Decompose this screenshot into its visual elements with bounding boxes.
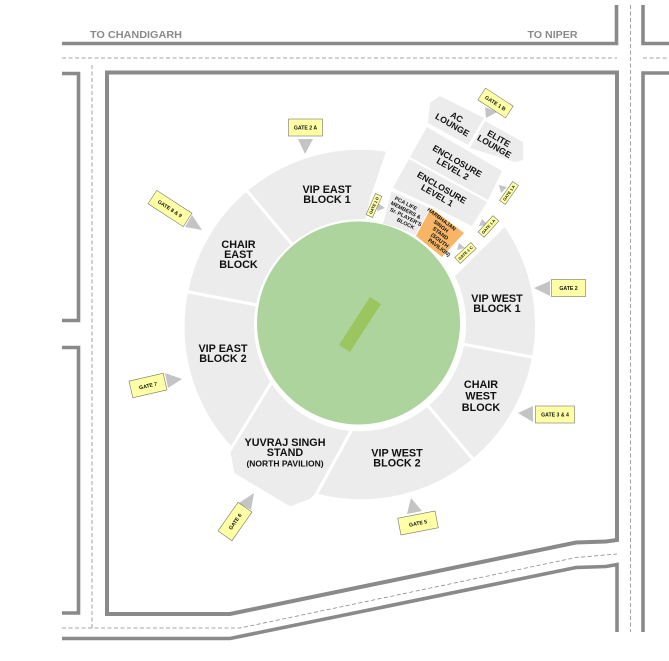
stand: PCA Life Members and Sr. Players Block: PCA LIFE bbox=[393, 196, 418, 213]
gate 3 and 4 bbox=[518, 406, 574, 423]
stand: Enclosure Level 1: LEVEL 1 bbox=[419, 182, 455, 209]
gate 5: GATE 5 bbox=[409, 519, 428, 529]
gate 1 C: GATE 1 C bbox=[457, 245, 474, 261]
stand: VIP East Block 2: BLOCK 2 bbox=[199, 353, 247, 365]
gate 1 D bbox=[366, 194, 385, 217]
stand: VIP West Block 1 bbox=[453, 225, 536, 357]
stand: VIP West Block 2: VIP WEST bbox=[371, 448, 423, 460]
gate 2 bbox=[534, 280, 586, 296]
gate 3 and 4: GATE 3 & 4 bbox=[541, 412, 569, 418]
gate 1 A upper bbox=[499, 182, 518, 204]
gate 1 A lower: GATE 1 A bbox=[481, 218, 496, 235]
stand: PCA Life Members and Sr. Players Block: MEMBERS & bbox=[389, 201, 422, 221]
stand: Harbhajan Singh Stand (South Pavilion): (SOUTH bbox=[429, 232, 449, 250]
gate 2: GATE 2 bbox=[559, 286, 578, 292]
stand: Yuvraj Singh Stand: STAND bbox=[267, 447, 303, 459]
stand: AC Lounge bbox=[428, 96, 484, 145]
gate 2 A bbox=[288, 119, 322, 154]
gate 7: GATE 7 bbox=[139, 381, 158, 391]
stand: AC Lounge: AC bbox=[449, 110, 465, 125]
gate 8 and 9 bbox=[148, 190, 202, 230]
stand: VIP West Block 1: BLOCK 1 bbox=[473, 303, 521, 315]
gate 1 C bbox=[455, 243, 476, 263]
stand: VIP East Block 2 bbox=[183, 292, 272, 449]
gate 5 bbox=[398, 498, 438, 535]
label: to Chandigarh: TO CHANDIGARH bbox=[90, 30, 182, 41]
stand: PCA Life Members and Sr. Players Block: Sr. PLAYER'S bbox=[389, 207, 423, 228]
stand: Chair West Block: BLOCK bbox=[462, 402, 500, 414]
stand: VIP West Block 2 bbox=[316, 405, 474, 501]
stand: Harbhajan Singh Stand (South Pavilion): STAND bbox=[431, 226, 449, 242]
label: to NIPER: TO NIPER bbox=[528, 30, 578, 41]
stand: Enclosure Level 2 bbox=[410, 127, 502, 200]
stand: VIP West Block 2: BLOCK 2 bbox=[373, 458, 421, 470]
stand: Harbhajan Singh Stand (South Pavilion): PAVILION) bbox=[426, 238, 451, 259]
gate 1 A upper: GATE 1 A bbox=[502, 184, 516, 202]
stand: Yuvraj Singh Stand bbox=[229, 382, 352, 508]
gate 1 A lower bbox=[478, 216, 499, 237]
stand: AC Lounge: LOUNGE bbox=[433, 111, 471, 139]
stand: Yuvraj Singh Stand: (NORTH PAVILION) bbox=[246, 458, 324, 468]
stand: Enclosure Level 1: ENCLOSURE bbox=[415, 169, 468, 206]
stand: Enclosure Level 2: LEVEL 2 bbox=[435, 156, 471, 182]
stand: Chair East Block: EAST bbox=[224, 249, 253, 261]
stand: Chair West Block: CHAIR bbox=[464, 379, 498, 391]
gate 2 A: GATE 2 A bbox=[294, 126, 317, 132]
stand: Yuvraj Singh Stand: YUVRAJ SINGH bbox=[244, 437, 326, 449]
stand: Harbhajan Singh Stand (South Pavilion): HARBHAJAN bbox=[426, 207, 457, 233]
stand: Elite Lounge: ELITE bbox=[485, 128, 512, 149]
gate 1 D: GATE 1 D bbox=[368, 196, 380, 215]
stand: Elite Lounge bbox=[470, 121, 523, 162]
stand: Harbhajan Singh Stand (South Pavilion): SINGH bbox=[432, 219, 449, 235]
stand: Chair East Block: BLOCK bbox=[219, 259, 258, 271]
stand: Chair East Block: CHAIR bbox=[221, 239, 256, 251]
gate 6 bbox=[218, 493, 254, 541]
gate 6: GATE 6 bbox=[228, 513, 244, 531]
stand: Chair West Block: WEST bbox=[465, 390, 497, 402]
stand: VIP West Block 1: VIP WEST bbox=[471, 293, 523, 305]
gate 7 bbox=[129, 373, 182, 398]
stand: PCA Life Members and Sr. Players Block bbox=[383, 192, 430, 235]
cricket ground bbox=[257, 222, 460, 424]
stand: Enclosure Level 2: ENCLOSURE bbox=[431, 143, 484, 179]
stand: VIP East Block 1: VIP EAST bbox=[302, 184, 352, 196]
gate 1 B bbox=[478, 88, 513, 118]
cricket pitch bbox=[339, 297, 381, 352]
stand: Chair East Block bbox=[187, 190, 293, 305]
stand: Enclosure Level 1 bbox=[393, 159, 487, 226]
stand: Harbhajan Singh Stand (South Pavilion) bbox=[411, 207, 466, 259]
stand: VIP East Block 1: BLOCK 1 bbox=[303, 194, 351, 206]
gate 1 B: GATE 1 B bbox=[483, 95, 507, 113]
stand: VIP East Block 1 bbox=[246, 148, 388, 245]
stand: PCA Life Members and Sr. Players Block: BLOCK bbox=[395, 217, 415, 231]
stand: Elite Lounge: LOUNGE bbox=[475, 133, 513, 160]
stand: VIP East Block 2: VIP EAST bbox=[198, 343, 248, 355]
gate 8 and 9: GATE 8 & 9 bbox=[156, 199, 183, 220]
stand: Chair West Block bbox=[427, 344, 534, 460]
